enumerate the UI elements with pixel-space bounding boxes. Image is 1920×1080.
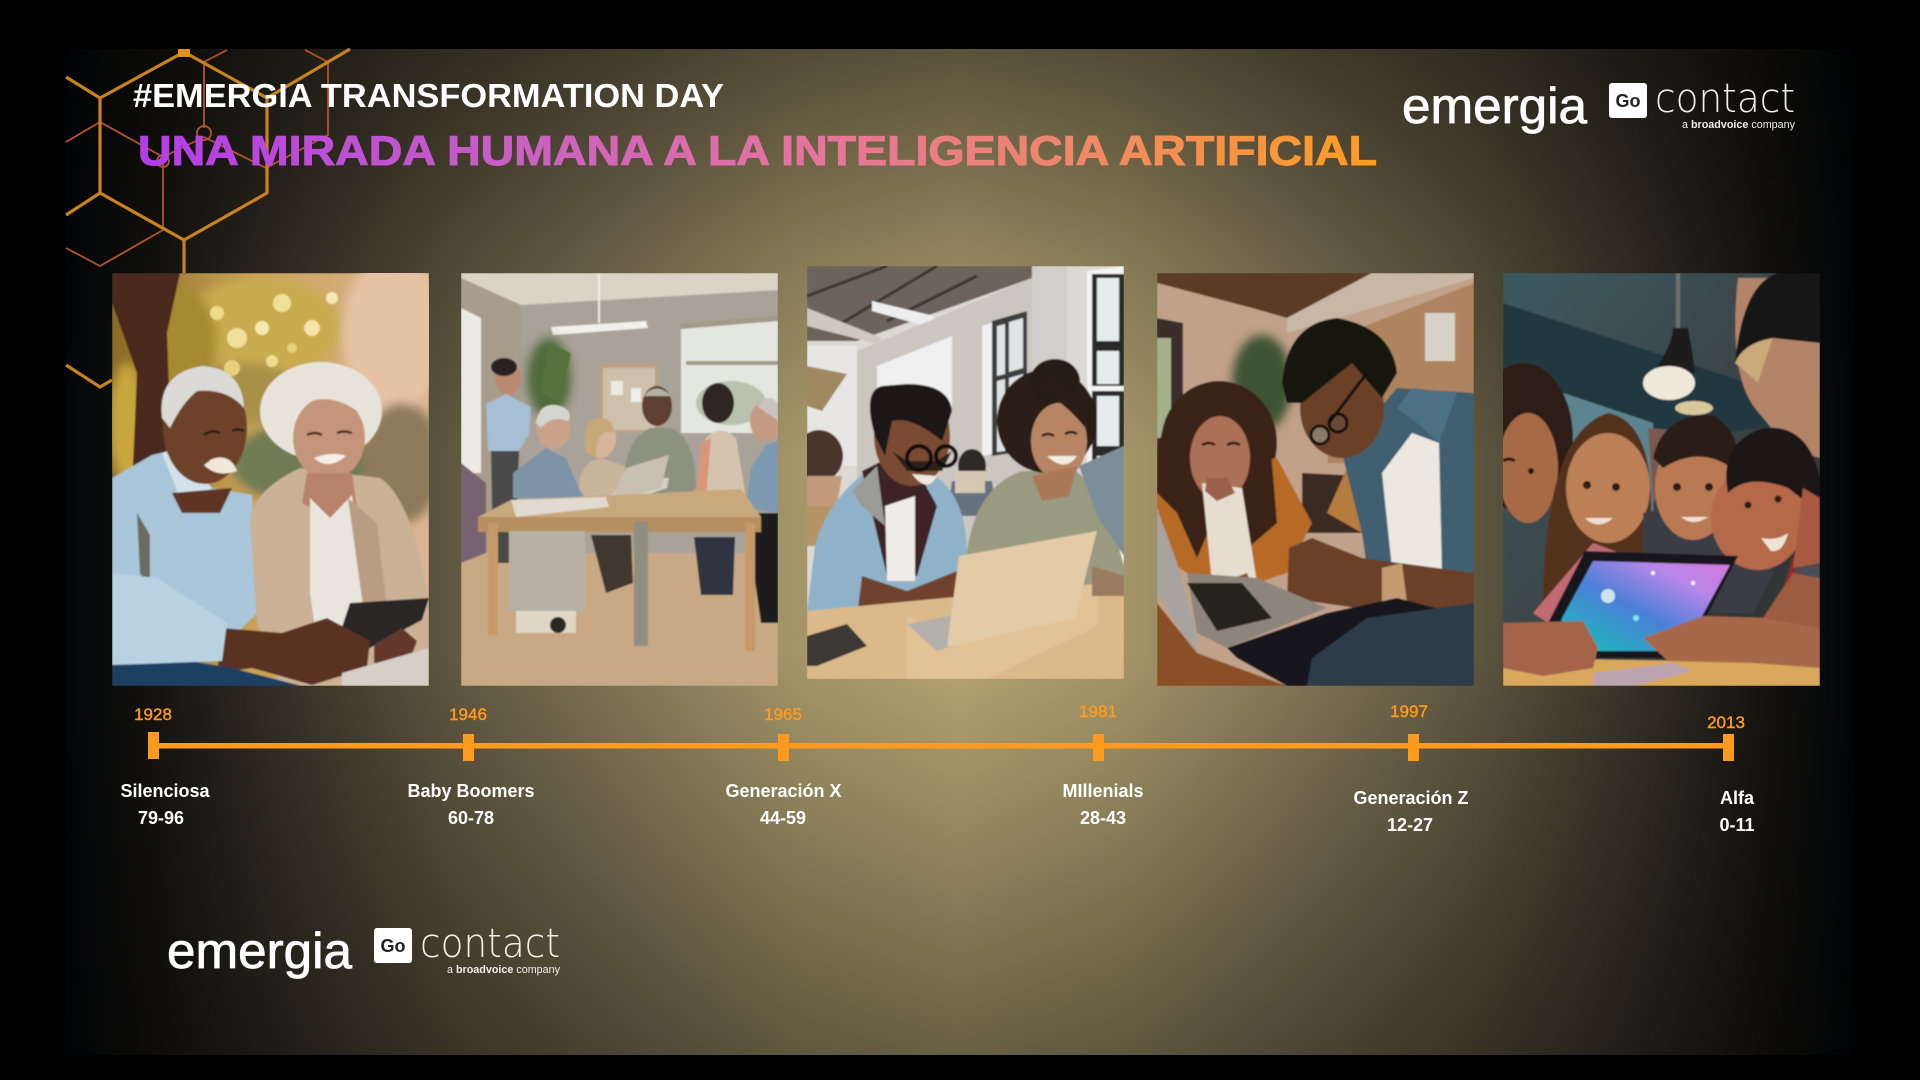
tick and labels: 1997 Generacion Z: 1997 <box>1390 702 1428 721</box>
tick and labels: 1965 Generacion X: 44-59 <box>760 808 806 828</box>
middle boy <box>1643 415 1773 613</box>
tick and labels: 1997 Generacion Z <box>1353 702 1469 835</box>
photo: Generacion Z / Alfa, children around tablet <box>1473 273 1820 686</box>
logo: GoContact: a broadvoice company <box>1682 119 1795 131</box>
tick and labels: 1965 Generacion X <box>725 705 842 828</box>
child at far left <box>1503 362 1574 524</box>
laptop <box>947 531 1097 647</box>
hexagon decoration <box>66 49 350 387</box>
logo: GoContact: contact <box>1655 76 1795 122</box>
heading: main title: UNA MIRADA HUMANA A LA INTELIGENCIA ARTIFICIAL <box>138 127 1377 174</box>
tablet <box>1548 551 1738 658</box>
tick and labels: 2013 Alfa: 0-11 <box>1719 815 1755 835</box>
woman in cardigan <box>696 383 746 498</box>
tick and labels: 1965 Generacion X: 1965 <box>764 705 802 724</box>
logo: emergia: emergia <box>167 923 352 979</box>
logo: GoContact: Go <box>380 936 406 956</box>
photo: Baby Boomers, office meeting <box>461 273 780 686</box>
photo: Silenciosa, older couple with tablet <box>109 253 442 686</box>
tick and labels: 2013 Alfa <box>1707 713 1755 835</box>
logo: GoContact: Go <box>1616 91 1641 111</box>
logo: GoContact: contact <box>420 921 560 967</box>
hands and table <box>1503 573 1820 686</box>
woman <box>1157 381 1312 583</box>
tick and labels: 2013 Alfa: 2013 <box>1707 713 1745 732</box>
timeline <box>120 702 1755 835</box>
tick and labels: 1997 Generacion Z: Generación Z <box>1353 788 1469 808</box>
tick and labels: 1981 Millenials: 1981 <box>1079 702 1117 721</box>
photo: Millenials, pair working at laptop <box>1157 273 1474 686</box>
blond woman <box>578 418 626 497</box>
tick and labels: 1946 Baby Boomers: 60-78 <box>448 808 494 828</box>
standing woman <box>486 358 531 563</box>
photo: Generacion X, two colleagues with laptop <box>795 266 1124 679</box>
man in denim jacket <box>807 384 967 631</box>
tick and labels: 1946 Baby Boomers <box>407 705 535 828</box>
tick and labels: 1965 Generacion X: Generación X <box>725 781 842 801</box>
logos top right <box>1402 76 1795 134</box>
heading: event tag: #EMERGIA TRANSFORMATION DAY <box>133 77 724 114</box>
timeline axis <box>153 743 1729 748</box>
logo: GoContact <box>374 921 560 976</box>
tick and labels: 1946 Baby Boomers: Baby Boomers <box>407 781 535 801</box>
tick and labels: 2013 Alfa: Alfa <box>1720 788 1755 808</box>
tick and labels: 1981 Millenials: 28-43 <box>1080 808 1126 828</box>
tick and labels: 1928 Silenciosa: 1928 <box>134 705 172 724</box>
tick and labels: 1997 Generacion Z: 12-27 <box>1387 815 1433 835</box>
tick and labels: 1946 Baby Boomers: 1946 <box>449 705 487 724</box>
tick and labels: 1981 Millenials: MIllenials <box>1062 781 1144 801</box>
hands and sleeve <box>1238 538 1474 610</box>
tick and labels: 1928 Silenciosa: 79-96 <box>138 808 184 828</box>
tick and labels: 1928 Silenciosa <box>120 705 211 828</box>
man <box>1282 317 1474 574</box>
seated man <box>513 405 583 498</box>
logo: GoContact <box>1609 76 1795 131</box>
boy at right <box>1711 427 1820 588</box>
older child at top right <box>1735 273 1820 458</box>
girl <box>1533 413 1651 633</box>
standing man <box>624 386 696 498</box>
woman in sage shirt <box>967 359 1124 596</box>
table <box>478 489 761 651</box>
table <box>807 581 1124 679</box>
man at right <box>747 398 778 624</box>
tick and labels: 1981 Millenials <box>1062 702 1144 828</box>
logo: GoContact: a broadvoice company <box>447 964 560 976</box>
laptop <box>1157 508 1327 658</box>
logos bottom left <box>167 921 560 979</box>
tick and labels: 1928 Silenciosa: Silenciosa <box>120 781 211 801</box>
logo: emergia: emergia <box>1402 78 1587 134</box>
